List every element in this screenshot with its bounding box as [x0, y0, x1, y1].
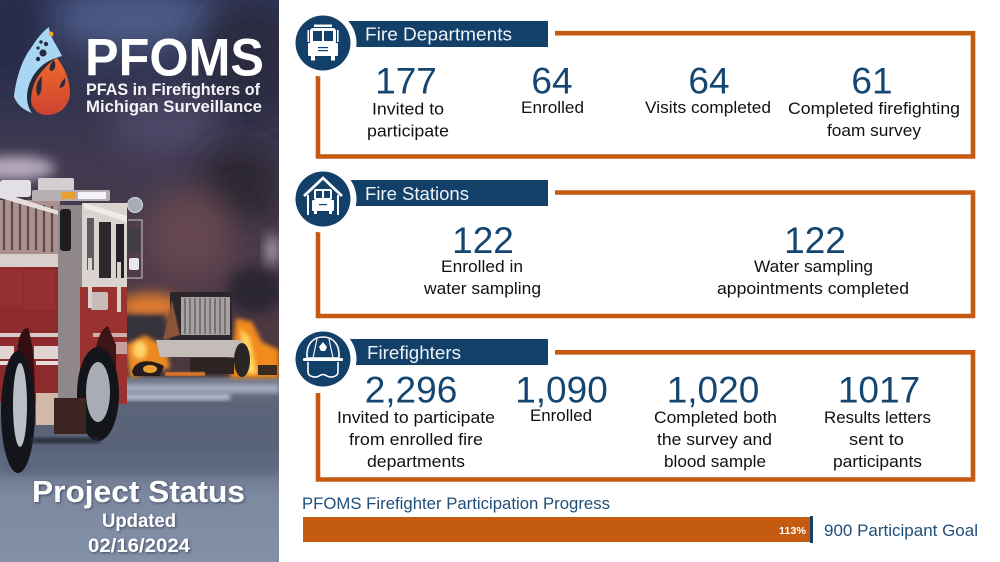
stat: 1017 results letters: sent to [849, 431, 904, 449]
stat: 177 invited [367, 60, 449, 140]
goal label: 900 Participant Goal [824, 521, 978, 540]
stat: 177 invited: Invited to [372, 100, 444, 118]
stat: 122 enrolled in water sampling: 122 [452, 220, 514, 261]
stat: 1,020 completed [654, 369, 777, 471]
logo wordmark: PFOMS: PFOMS [85, 28, 264, 88]
stat: 2,296 invited: Invited to participate [337, 409, 495, 427]
heading: project status and date: 02/16/2024 [88, 536, 190, 557]
stat: 1017 results letters: 1017 [838, 369, 920, 410]
photo: fire engine [0, 178, 142, 473]
icon: firefighter helmet [296, 332, 350, 386]
stat: 1,020 completed: the survey and [657, 431, 772, 449]
panel: left photo sidebar [0, 0, 300, 562]
stat: 1,090 enrolled: 1,090 [515, 369, 608, 410]
stat: 1017 results letters [824, 369, 931, 471]
stat: 61 completed survey: foam survey [827, 122, 922, 140]
stat: 177 invited: 177 [375, 60, 437, 101]
panel: firefighters [290, 326, 973, 480]
heading text: Firefighters [367, 342, 461, 363]
stat: 122 appointments completed [717, 220, 909, 298]
heading banner: firefighters [340, 339, 548, 365]
subtitle: survey full name: Michigan Surveillance [86, 97, 262, 116]
icon: fire engine [296, 16, 350, 70]
stat: 2,296 invited [337, 369, 495, 471]
heading text: Fire Stations [365, 183, 469, 204]
stat: 122 enrolled in water sampling: water sampling [423, 280, 541, 298]
subtitle: survey full name: PFAS in Firefighters of [86, 80, 260, 99]
heading: project status and date: Updated [102, 511, 176, 532]
photo: road [0, 384, 279, 472]
logo: PFOMS water drop and flame [14, 27, 70, 115]
heading banner: fire departments [340, 21, 548, 47]
progress bar: 113% [779, 526, 806, 537]
stat: 64 visits completed: Visits completed [645, 99, 771, 117]
subtitle: survey full name [87, 83, 262, 116]
photo: smoke background [0, 0, 300, 319]
heading: project status and date: Project Status [32, 474, 245, 509]
stat: 64 enrolled: Enrolled [521, 99, 584, 117]
photo: burning truck [125, 292, 279, 378]
stat: 61 completed survey: 61 [851, 60, 893, 101]
stat: 61 completed survey: Completed firefighting [788, 100, 960, 118]
stat: 122 appointments completed: appointments completed [717, 280, 909, 298]
heading text: Fire Departments [365, 24, 512, 45]
stat: 1,090 enrolled: Enrolled [530, 407, 592, 425]
stat: 64 enrolled: 64 [531, 60, 573, 101]
heading: project status and date [32, 474, 245, 557]
progress heading: PFOMS Firefighter Participation Progress [302, 495, 610, 513]
stat: 64 visits completed: 64 [688, 60, 730, 101]
stat: 1,020 completed: 1,020 [667, 369, 759, 410]
stat: 122 appointments completed: 122 [784, 220, 846, 261]
stat: 122 enrolled in water sampling [423, 220, 541, 298]
progress bar [303, 516, 813, 543]
stat: 177 invited: participate [367, 122, 449, 140]
stat: 1,020 completed: blood sample [664, 453, 766, 471]
stat: 64 visits completed [645, 60, 771, 117]
stat: 1,020 completed: Completed both [654, 409, 777, 427]
stat: 2,296 invited: from enrolled fire [349, 431, 483, 449]
stat: 1017 results letters: participants [833, 453, 922, 471]
panel: fire stations [290, 166, 973, 316]
stat: 64 enrolled [521, 60, 584, 117]
stat: 122 appointments completed: Water sampling [754, 258, 873, 276]
stat: 2,296 invited: 2,296 [365, 369, 457, 410]
stat: 61 completed survey [788, 60, 960, 140]
stat: 122 enrolled in water sampling: Enrolled in [441, 258, 523, 276]
icon: fire station [296, 172, 350, 226]
stat: 2,296 invited: departments [367, 453, 465, 471]
heading banner: fire stations [340, 180, 548, 206]
panel: fire departments [290, 10, 973, 156]
stat: 1017 results letters: Results letters [824, 409, 931, 427]
